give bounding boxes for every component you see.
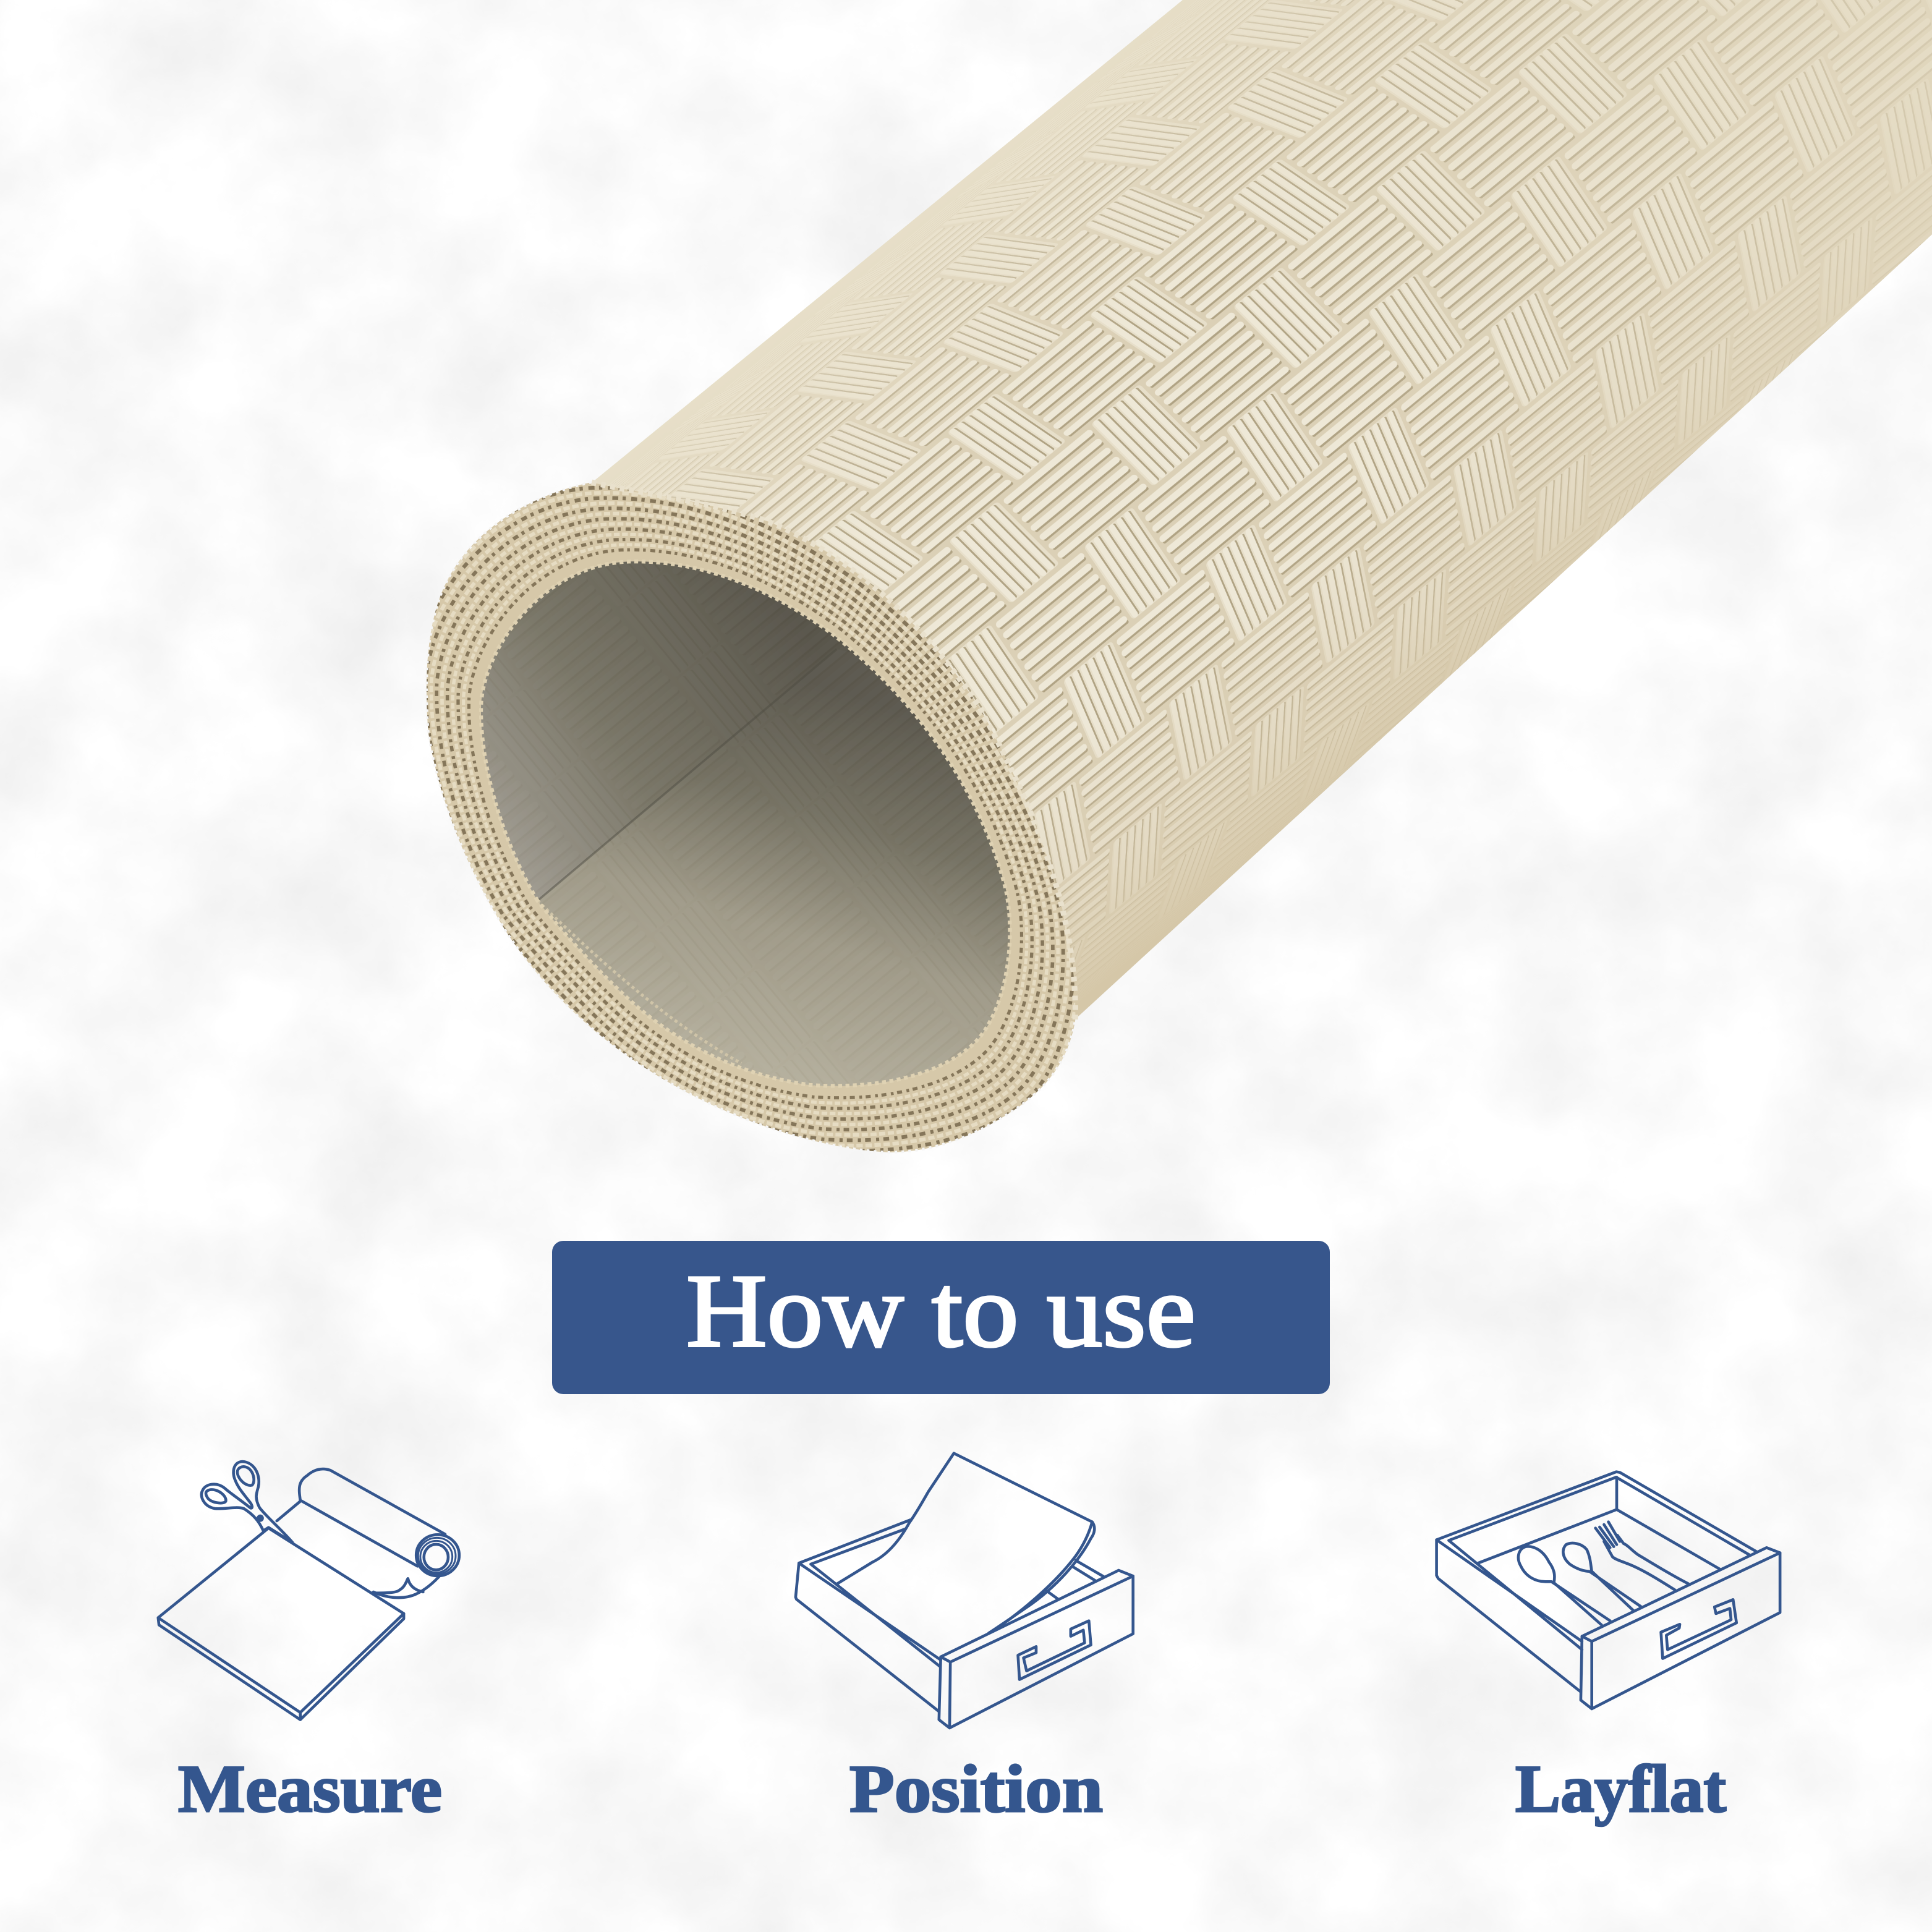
label: Layflat: Layflat [1515,1751,1726,1826]
serrated outer edge of the roll [427,482,1075,1152]
inner tube: lighter overlapping sheet below the seam [488,561,1010,1086]
step 3: Layflat [1437,1472,1780,1826]
inner tube: far wall [481,561,1010,1086]
heading banner: How to use: How to use [686,1253,1196,1369]
label: Measure: Measure [178,1751,442,1826]
heading banner: How to use [552,1241,1330,1394]
roll body with basket-weave texture [595,0,1932,1016]
step 2: Position [796,1453,1133,1826]
step 1: Measure [158,1462,459,1826]
product photo: rolled beige woven drawer liner [427,0,1932,1152]
icon: liner sheet curling into a drawer [796,1453,1133,1728]
label: Position: Position [849,1751,1103,1826]
roll end: corrugated layered rim and inner tube [427,480,1078,1152]
icon: roll, scissors and cut sheet [158,1462,459,1720]
icon: lined drawer with cutlery [1437,1472,1780,1709]
rim of ribs where the weave meets the end [592,482,1075,1020]
